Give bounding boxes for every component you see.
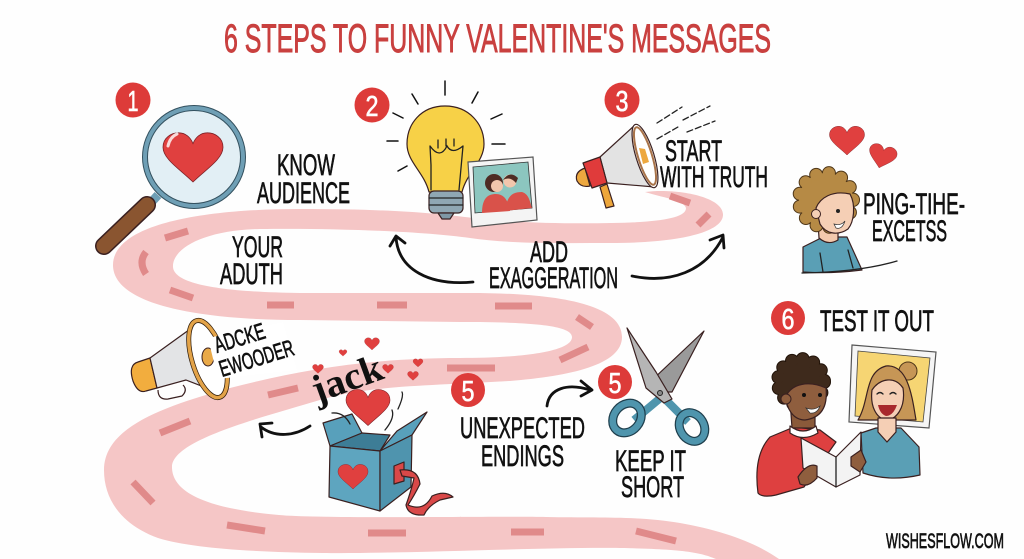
label: keep it short bbox=[615, 445, 686, 504]
icon: curly-haired person bbox=[799, 173, 897, 273]
label: add exaggeration: ADD bbox=[530, 236, 568, 269]
icon: light bulb bbox=[387, 81, 505, 219]
label: keep it short: KEEP IT bbox=[615, 445, 686, 478]
label: your adult: ADUTH bbox=[220, 258, 283, 291]
label: add exaggeration: EXAGGERATION bbox=[489, 262, 618, 295]
text: jack: jack bbox=[304, 346, 389, 412]
label: garbled megaphone text: EWOODER bbox=[216, 334, 297, 382]
icon: scissors bbox=[607, 328, 710, 446]
step 6 number badge: 6 bbox=[782, 304, 794, 336]
arrow: to scissors bbox=[547, 381, 592, 406]
label: unexpected endings: ENDINGS bbox=[481, 440, 564, 473]
label: start with truth: WITH TRUTH bbox=[660, 161, 768, 194]
step 5 badge: keep it short: 5 bbox=[608, 368, 622, 400]
step 6 number badge bbox=[771, 301, 805, 336]
icon: framed photo of laughing woman bbox=[849, 345, 936, 428]
label: know audience: AUDIENCE bbox=[257, 177, 350, 210]
step 3 number badge bbox=[604, 82, 640, 118]
icon: magnifying glass with heart bbox=[104, 108, 243, 246]
label: unexpected endings: UNEXPECTED bbox=[460, 412, 585, 445]
arrow: to bulb bbox=[390, 236, 473, 283]
step 5 badge: unexpected endings bbox=[451, 373, 485, 408]
icon: polaroid couple photo bbox=[468, 157, 537, 227]
label: unexpected endings bbox=[460, 412, 585, 473]
label: keep it short: SHORT bbox=[621, 471, 684, 504]
label: know audience: KNOW bbox=[277, 149, 335, 182]
arrow: to truth bbox=[632, 235, 724, 278]
label: garbled excess: EXCETSS bbox=[872, 215, 947, 248]
label: garbled excess: PING-TIHE- bbox=[863, 188, 965, 221]
winding road path bbox=[104, 191, 779, 559]
step 1 number badge: 1 bbox=[128, 86, 138, 118]
label: your adult bbox=[220, 231, 283, 291]
label: your adult: YOUR bbox=[232, 231, 283, 264]
icon: people reading card bbox=[757, 359, 920, 496]
label: start with truth: START bbox=[665, 135, 722, 168]
step 5 badge: unexpected endings: 5 bbox=[462, 376, 474, 408]
label: garbled megaphone text bbox=[208, 318, 297, 382]
icon: orange megaphone bbox=[131, 316, 235, 402]
label: add exaggeration bbox=[489, 236, 618, 295]
icons: floating hearts bbox=[830, 126, 899, 171]
step 2 number badge bbox=[354, 88, 390, 123]
arrow: box to megaphone bbox=[260, 423, 310, 437]
label: know audience bbox=[257, 149, 350, 210]
step 2 number badge: 2 bbox=[366, 91, 378, 123]
heading: test it out: TEST IT OUT bbox=[820, 305, 934, 338]
step 3 number badge: 3 bbox=[616, 86, 628, 118]
step 5 badge: keep it short bbox=[598, 365, 632, 400]
icons: small hearts bbox=[312, 338, 423, 380]
label: garbled excess bbox=[863, 188, 965, 248]
sound lines bbox=[657, 106, 715, 139]
icon: jack-in-the-box bbox=[323, 390, 453, 515]
label: start with truth bbox=[660, 135, 768, 194]
icon: megaphone red bbox=[576, 122, 663, 208]
label: garbled megaphone text: ADCKE bbox=[211, 318, 268, 358]
step 1 number badge bbox=[116, 82, 150, 118]
